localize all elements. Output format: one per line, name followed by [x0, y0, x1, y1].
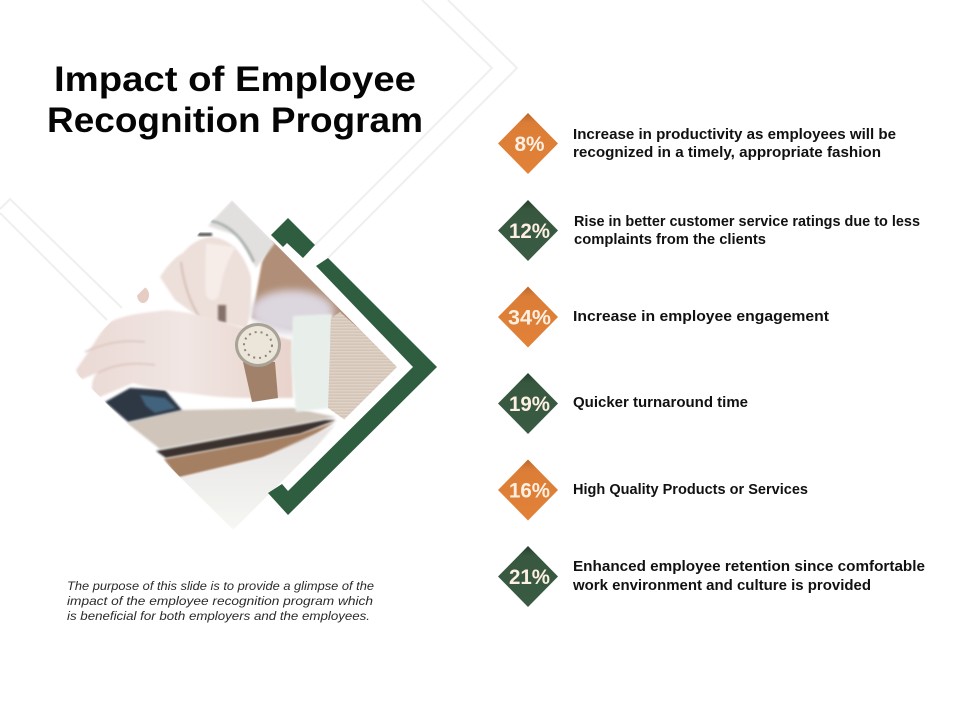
upper hand	[160, 237, 251, 328]
stat 4: Quicker turnaround time	[573, 395, 748, 411]
top sleeve	[208, 200, 275, 268]
decorative chevron lines: top right	[315, 0, 517, 258]
stat 6: 21%	[509, 566, 550, 589]
upper fragment	[271, 218, 315, 258]
footnote text: impact of the employee recognition program which	[67, 596, 373, 608]
stat 2	[498, 200, 920, 261]
stat 1: 8%	[514, 133, 545, 156]
footnote text: is beneficial for both employers and the employees.	[67, 611, 370, 623]
main bracket	[268, 258, 437, 515]
photo: hands typing on a laptop, cropped to a diamond	[76, 200, 400, 530]
wood desk upper	[251, 240, 378, 348]
title: Impact of Employee	[54, 60, 416, 99]
watch face	[235, 323, 281, 367]
laptop keys	[105, 388, 182, 422]
stat 6	[498, 546, 925, 607]
main hand	[76, 310, 293, 398]
stat 6: Enhanced employee retention since comfortable	[573, 559, 925, 575]
shirt cuff	[291, 314, 332, 412]
stat 5	[498, 460, 808, 520]
stat 4: 19%	[509, 393, 550, 416]
stat 2: complaints from the clients	[574, 232, 766, 248]
watch strap	[243, 362, 278, 402]
laptop body	[127, 408, 336, 449]
green chevron frame	[268, 218, 437, 515]
stat 5: 16%	[509, 480, 550, 502]
stat 3: 34%	[508, 306, 551, 330]
stat 2: 12%	[509, 220, 550, 243]
title: Recognition Program	[47, 101, 423, 140]
pale sheet at bottom	[178, 425, 335, 530]
wood desk lower	[164, 422, 335, 478]
stat 4	[498, 373, 748, 434]
footnote text	[67, 581, 374, 623]
stat 2: Rise in better customer service ratings due to less	[574, 214, 920, 230]
laptop dark edge	[156, 420, 336, 458]
pale desk reflection	[250, 290, 334, 334]
sweater	[328, 312, 400, 420]
stat 3	[498, 286, 829, 348]
footnote text: The purpose of this slide is to provide a glimpse of the	[67, 581, 374, 593]
stat 1: Increase in productivity as employees will be	[573, 127, 896, 143]
stat 1: recognized in a timely, appropriate fashion	[573, 145, 881, 161]
decorative chevron lines: left	[0, 199, 122, 320]
title	[47, 60, 423, 140]
stat 1	[498, 113, 896, 174]
stat 6: work environment and culture is provided	[572, 578, 871, 594]
stat 3: Increase in employee engagement	[573, 309, 829, 325]
stat 5: High Quality Products or Services	[573, 482, 808, 498]
